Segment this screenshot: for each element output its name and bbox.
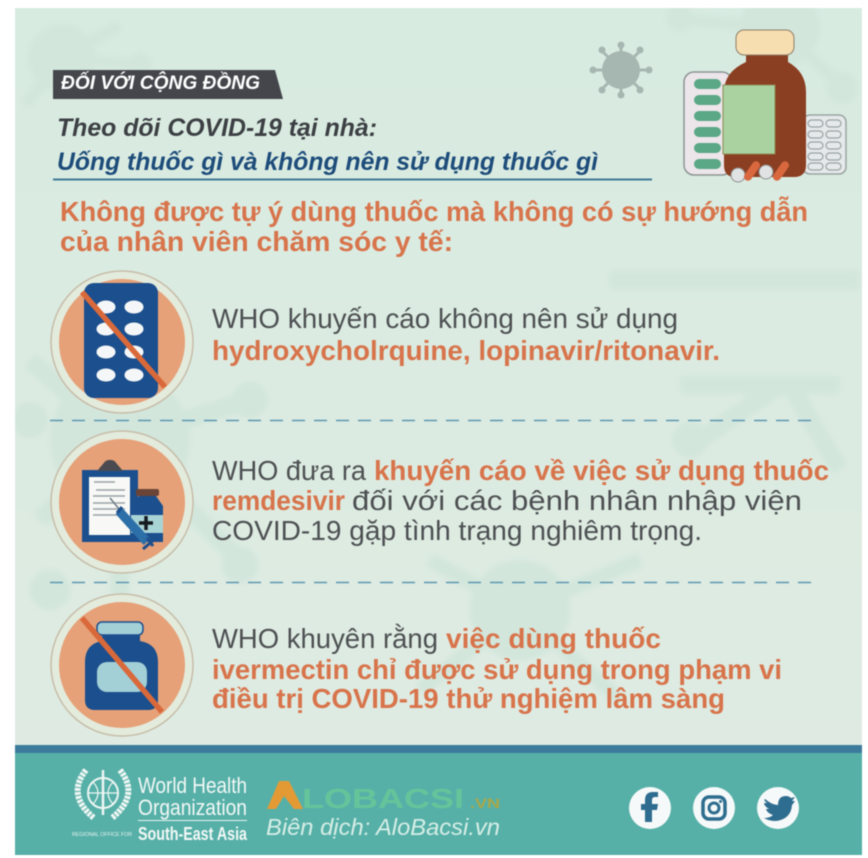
text: remdesivir recommendation: khuyến cáo về việc sử dụng thuốc: [374, 455, 829, 486]
subheading: which medicines: Uống thuốc gì và không nên sử dụng thuốc gì: [57, 148, 598, 176]
logo: AloBacsi: .VN: [470, 795, 500, 811]
icon: prescription, bottle and syringe: [51, 431, 193, 573]
badge: community label: [53, 70, 283, 99]
badge: community label: ĐỐI VỚI CỘNG ĐỒNG: [61, 72, 260, 94]
logo: World Health Organization: REGIONAL OFFICE FOR: [72, 832, 132, 838]
text: ivermectin advice: WHO khuyên rằng: [212, 623, 438, 654]
text: remdesivir recommendation: remdesivir: [212, 485, 345, 516]
logo: World Health Organization: [72, 770, 248, 844]
logo: AloBacsi: [266, 781, 500, 840]
logo: AloBacsi: LOBACSI: [302, 783, 464, 814]
text: ivermectin advice: điều trị COVID-19 thử nghiệm lâm sàng: [212, 683, 725, 714]
text: ivermectin advice: [212, 623, 782, 714]
icon: crossed-out medicine bottle: [51, 594, 193, 736]
text: ivermectin advice: ivermectin chỉ được sử dụng trong phạm vi: [212, 654, 782, 685]
logo: World Health Organization: South-East Asia: [138, 824, 248, 844]
icon: Twitter: [757, 787, 799, 829]
warning heading: Không được tự ý dùng thuốc mà không có sự hướng dẫn: [60, 196, 808, 227]
logo: World Health Organization: Organization: [138, 795, 247, 820]
icon: Instagram: [693, 787, 735, 829]
icon: medicine bottle and blister packs: [684, 30, 846, 182]
icon: virus: [590, 42, 652, 98]
icon: Facebook: [629, 787, 671, 829]
warning heading: [60, 196, 808, 257]
text: remdesivir recommendation: WHO đưa ra: [212, 455, 367, 486]
decorative faint virus shapes: [16, 360, 842, 701]
text: WHO advises against: [212, 303, 720, 366]
icon: crossed-out blister pack: [51, 271, 193, 413]
warning heading: của nhân viên chăm sóc y tế:: [60, 226, 453, 257]
logo: World Health Organization: World Health: [138, 773, 247, 798]
heading: monitoring at home: Theo dõi COVID-19 tại nhà:: [57, 114, 377, 142]
text: remdesivir recommendation: đối với các bệnh nhân nhập viện: [352, 485, 802, 516]
text: remdesivir recommendation: COVID-19 gặp tình trạng nghiêm trọng.: [212, 515, 702, 546]
text: remdesivir recommendation: [212, 455, 829, 546]
text: WHO advises against: hydroxycholrquine, lopinavir/ritonavir.: [212, 335, 720, 366]
logo: AloBacsi: Biên dịch: AloBacsi.vn: [266, 814, 500, 840]
text: ivermectin advice: việc dùng thuốc: [446, 623, 661, 654]
text: WHO advises against: WHO khuyến cáo không nên sử dụng: [212, 303, 678, 334]
footer band: [15, 745, 862, 855]
